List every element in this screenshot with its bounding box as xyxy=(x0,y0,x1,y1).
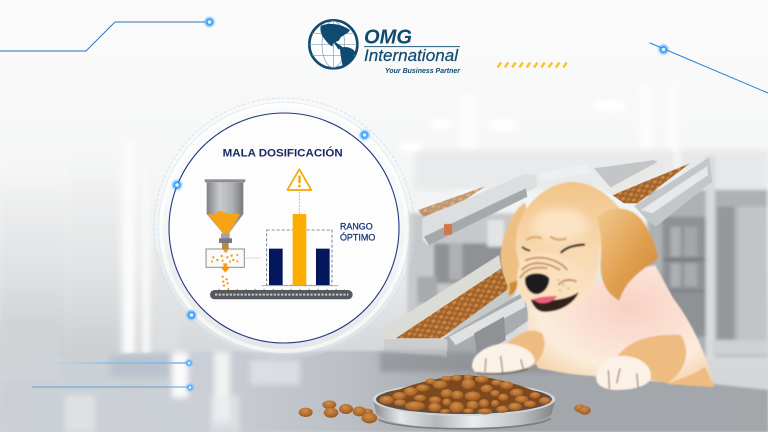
eyes xyxy=(523,247,529,250)
logo: OMG International: International xyxy=(364,47,459,65)
logo wordmark: OMG xyxy=(364,26,412,48)
conveyor belt xyxy=(210,289,353,299)
hopper machine xyxy=(205,179,260,290)
panel: mala dosificación circle xyxy=(154,98,414,358)
right ear xyxy=(597,209,658,301)
icon: globe xyxy=(309,20,357,68)
right foreleg and paw xyxy=(596,335,714,390)
kibble pile xyxy=(379,374,551,414)
head xyxy=(516,182,623,313)
logo: OMG International xyxy=(309,20,461,75)
loose kibble left xyxy=(299,400,377,423)
icon: warning triangle xyxy=(287,169,311,190)
glowing nodes xyxy=(172,18,668,390)
nose xyxy=(525,273,549,294)
puppy xyxy=(472,182,714,390)
loose kibble right xyxy=(574,404,591,415)
conveyor machinery xyxy=(384,157,768,360)
logo: OMG International: Your Business Partner xyxy=(385,68,461,75)
left ear xyxy=(501,203,528,296)
yellow dashes xyxy=(498,62,567,68)
heading: MALA DOSIFICACIÓN xyxy=(223,147,343,160)
food bowl xyxy=(299,374,591,429)
muzzle wrinkles xyxy=(517,253,580,307)
bowl xyxy=(373,399,555,429)
label: rango óptimo: ÓPTIMO xyxy=(340,233,375,243)
mouth and tongue xyxy=(531,292,579,312)
label: rango óptimo: RANGO xyxy=(340,221,373,231)
bar chart: optimal range xyxy=(262,192,338,286)
left foreleg and paw xyxy=(472,331,544,374)
puppy body xyxy=(528,265,714,387)
metal table xyxy=(0,330,768,432)
